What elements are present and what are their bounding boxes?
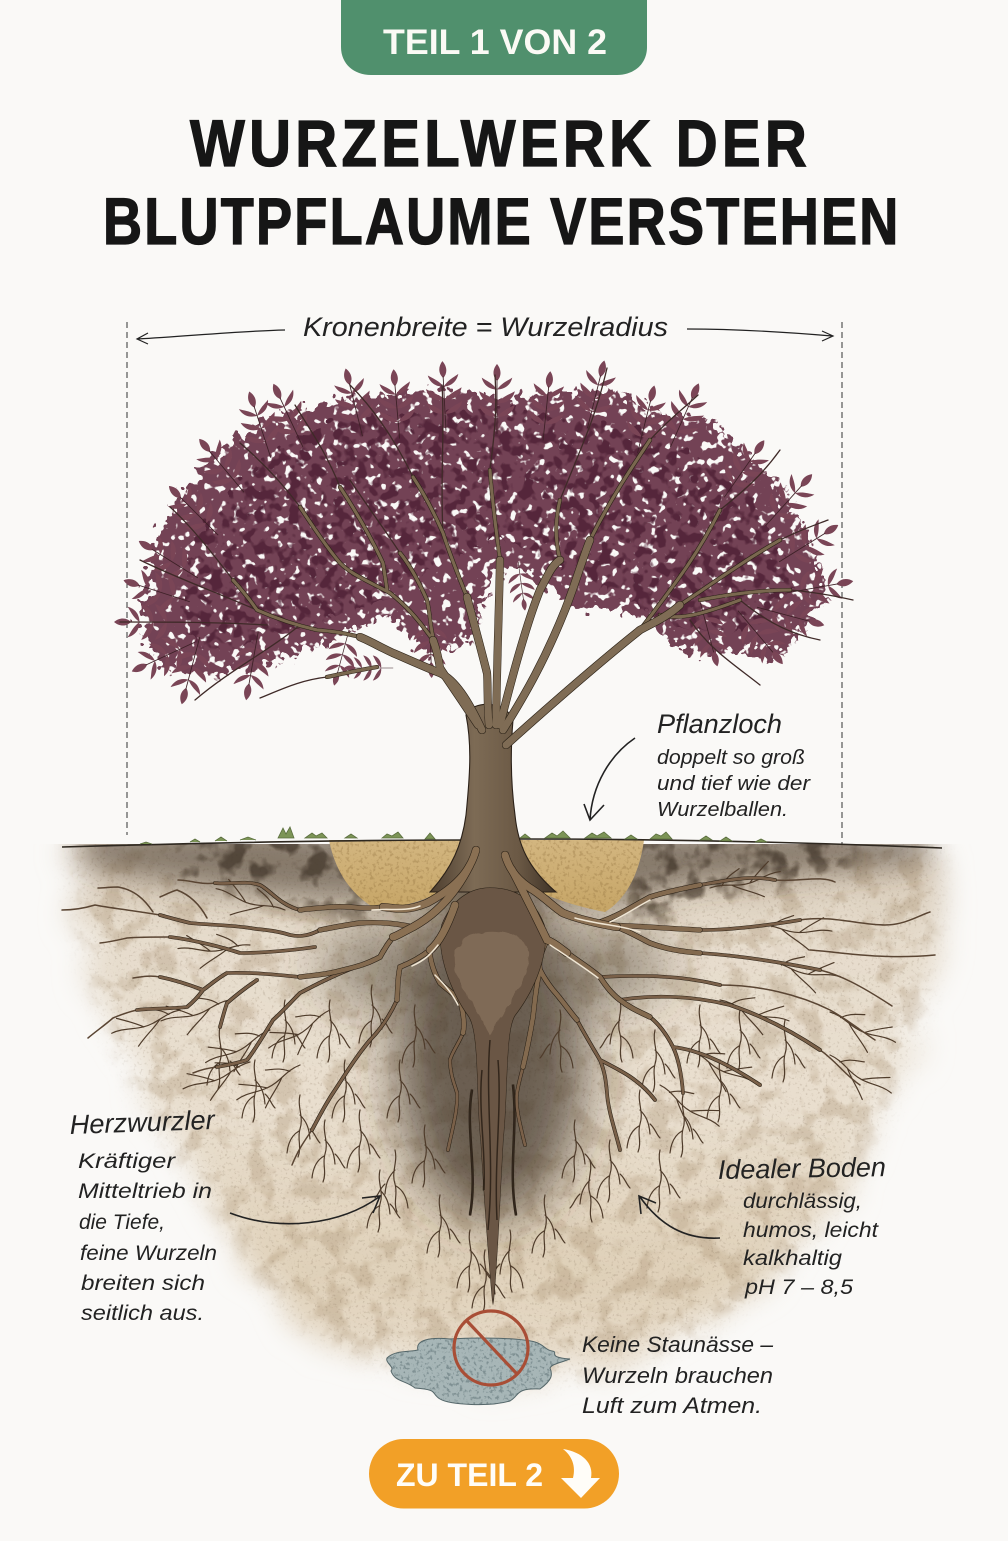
tree trunk [430, 704, 556, 892]
annotation: ideal soil: pH 7 – 8,5 [744, 1276, 853, 1299]
annotation: ideal soil: humos, leicht [743, 1219, 879, 1242]
ground line with grass [62, 827, 942, 848]
annotation: ideal soil: kalkhaltig [743, 1247, 842, 1270]
annotation: Herzwurzler: Kräftiger [78, 1150, 176, 1173]
soil cross-section [74, 830, 938, 1381]
annotation: Herzwurzler: seitlich aus. [81, 1302, 204, 1325]
root ball and taproot [441, 888, 545, 1305]
annotation: ideal soil [639, 1152, 886, 1299]
title: WURZELWERK DER [190, 108, 807, 181]
button: zu Teil 2: ZU TEIL 2 [396, 1457, 543, 1493]
main limbs [360, 540, 680, 745]
annotation: no waterlogging: Wurzeln brauchen [582, 1363, 773, 1388]
annotation: Herzwurzler: breiten sich [81, 1272, 205, 1295]
root tips [62, 879, 935, 1165]
secondary branches [233, 440, 790, 677]
planting hole [329, 840, 644, 912]
icon: no symbol [454, 1311, 528, 1385]
medium roots [137, 878, 820, 1150]
badge: Teil 1 von 2 [341, 0, 647, 75]
annotation: planting hole: doppelt so groß [657, 747, 805, 769]
annotation: Herzwurzler: die Tiefe, [79, 1211, 165, 1234]
puddle with prohibition sign [387, 1311, 570, 1405]
title: BLUTPFLAUME VERSTEHEN [103, 184, 898, 258]
annotation: planting hole: Wurzelballen. [657, 799, 788, 821]
badge: Teil 1 von 2: TEIL 1 VON 2 [383, 23, 607, 62]
icon: puddle [387, 1338, 570, 1405]
arrow: to planting hole [584, 738, 635, 820]
secondary roots [300, 885, 700, 1067]
root system [62, 850, 935, 1312]
thin twigs [120, 368, 853, 700]
annotation: ideal soil: Idealer Boden [718, 1152, 886, 1185]
crown of plum leaves [114, 356, 856, 709]
thick lateral roots [383, 850, 617, 953]
title [103, 108, 898, 258]
annotation: Herzwurzler: Mitteltrieb in [78, 1180, 212, 1203]
tree branches [120, 368, 853, 700]
dimension: crown width equals root radius [127, 312, 842, 900]
outer leaf sprigs [114, 356, 856, 709]
annotation: no waterlogging: Luft zum Atmen. [582, 1393, 762, 1418]
annotation: Herzwurzler [69, 1105, 380, 1325]
icon: curved down arrow [561, 1449, 600, 1498]
annotation: no waterlogging [582, 1332, 774, 1418]
annotation: planting hole [584, 709, 812, 821]
annotation: planting hole: Pflanzloch [657, 709, 782, 739]
arrow: to roots from left [230, 1196, 380, 1224]
dimension: crown width equals root radius: Kronenbreite = Wurzelradius [303, 312, 668, 342]
annotation: Herzwurzler: feine Wurzeln [80, 1242, 217, 1265]
annotation: no waterlogging: Keine Staunässe – [582, 1332, 774, 1357]
fine roots [107, 860, 901, 1312]
annotation: Herzwurzler: Herzwurzler [69, 1105, 216, 1140]
annotation: ideal soil: durchlässig, [743, 1190, 862, 1213]
arrow: to soil from right [639, 1196, 720, 1238]
button: zu Teil 2 [369, 1439, 619, 1508]
annotation: planting hole: und tief wie der [657, 773, 812, 795]
root highlights [372, 900, 650, 1005]
